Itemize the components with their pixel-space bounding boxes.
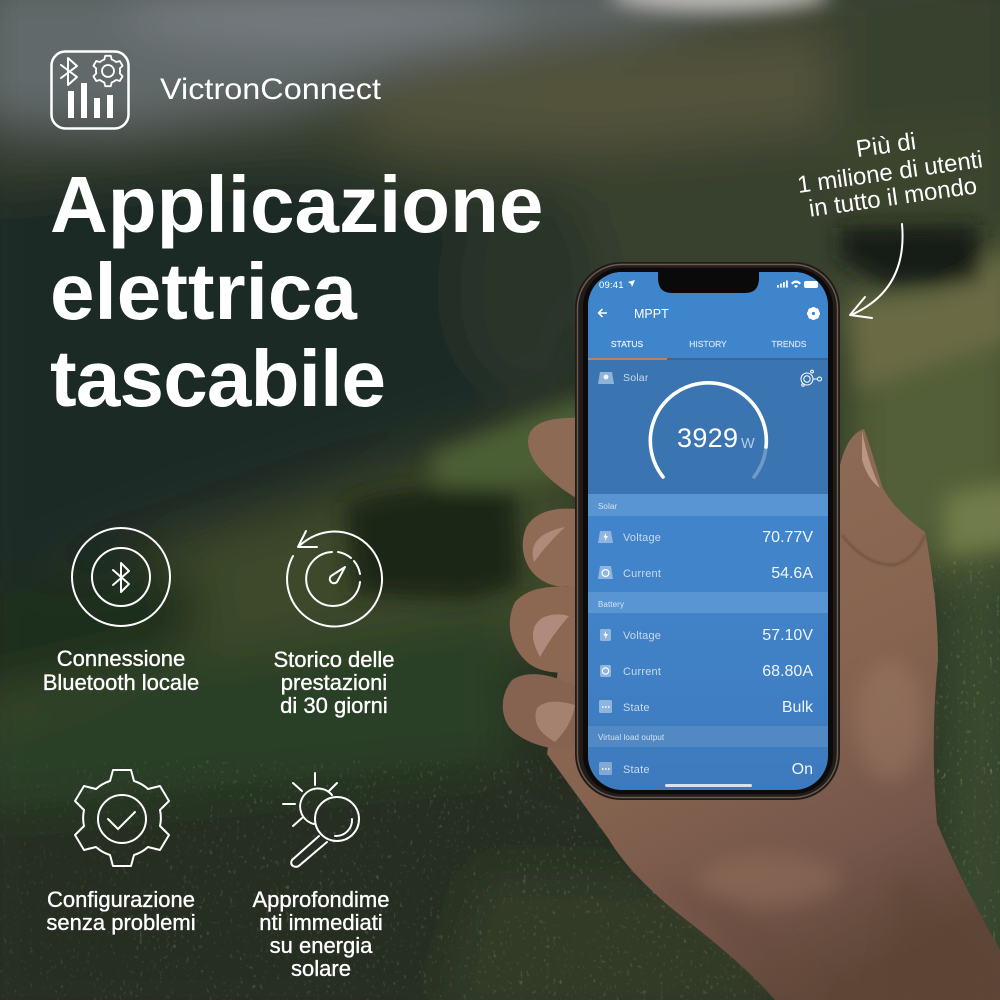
home indicator bbox=[665, 784, 752, 787]
feature: 30 day history bbox=[273, 531, 395, 718]
label bbox=[46, 887, 196, 935]
brand name: VictronConnect bbox=[160, 73, 381, 106]
tabs: STATUS bbox=[611, 339, 643, 349]
phone body bbox=[575, 262, 840, 800]
gauge arc bbox=[754, 447, 766, 477]
section: virtual load output: State bbox=[623, 764, 650, 776]
section: battery: 57.10V bbox=[762, 627, 813, 644]
network icon bbox=[801, 370, 822, 386]
label: Configurazione bbox=[47, 887, 195, 912]
thumb nail edge bbox=[862, 431, 880, 488]
section: virtual load output: Virtual load output bbox=[598, 733, 665, 742]
section: battery: Current bbox=[623, 666, 661, 678]
palm shading and highlights bbox=[650, 660, 1000, 1000]
title: tascabile bbox=[50, 334, 385, 423]
app logo icon bbox=[52, 52, 128, 128]
section: battery: Bulk bbox=[782, 699, 814, 716]
solar icon bbox=[598, 372, 614, 384]
index finger bbox=[528, 418, 590, 506]
callout text: in tutto il mondo bbox=[807, 172, 979, 223]
section: solar bbox=[588, 494, 828, 582]
label: Approfondime bbox=[253, 887, 389, 912]
callout text bbox=[796, 128, 984, 223]
callout text: 1 milione di utenti bbox=[796, 146, 984, 199]
title: elettrica bbox=[50, 247, 357, 336]
title bbox=[50, 160, 543, 423]
title: Applicazione bbox=[50, 160, 543, 249]
section: virtual load output bbox=[588, 726, 828, 778]
pinky finger bbox=[503, 674, 590, 749]
gauge panel bbox=[588, 360, 828, 494]
screen title: MPPT bbox=[634, 307, 669, 321]
section: battery: State bbox=[623, 702, 650, 714]
feature: easy configuration bbox=[46, 770, 196, 935]
section: solar: 70.77V bbox=[762, 529, 813, 546]
middle fingernail bbox=[533, 527, 565, 562]
label: Connessione bbox=[57, 646, 185, 671]
label: Bluetooth locale bbox=[43, 670, 199, 695]
section: battery: Battery bbox=[598, 600, 624, 609]
label: senza problemi bbox=[46, 910, 196, 935]
label: di 30 giorni bbox=[280, 693, 388, 718]
ring finger bbox=[510, 587, 590, 673]
palm and wrist bbox=[547, 429, 1000, 1000]
section: solar: Current bbox=[623, 568, 661, 580]
feature: bluetooth connection bbox=[43, 528, 199, 695]
section: solar: Solar bbox=[598, 502, 617, 511]
ring fingernail bbox=[533, 614, 569, 657]
label: nti immediati bbox=[259, 910, 383, 935]
status icons bbox=[777, 280, 818, 288]
back arrow bbox=[598, 309, 607, 317]
section: battery: 68.80A bbox=[762, 663, 813, 680]
icon: bluetooth bbox=[72, 528, 170, 626]
section: battery: Voltage bbox=[623, 630, 661, 642]
callout text: Più di bbox=[854, 128, 918, 163]
app header bar: HISTORY bbox=[689, 339, 727, 349]
label: Storico delle bbox=[273, 647, 395, 672]
icon: gear with check bbox=[75, 770, 169, 866]
section: battery bbox=[588, 592, 828, 716]
icon: gauge with back arrow bbox=[287, 531, 382, 626]
icon: sun and magnifier bbox=[283, 773, 359, 867]
callout arrow bbox=[850, 224, 903, 318]
thumb crease bbox=[842, 535, 925, 565]
label: solare bbox=[291, 956, 351, 981]
gauge panel: Solar bbox=[623, 372, 649, 384]
label bbox=[253, 887, 389, 981]
section: virtual load output: On bbox=[792, 761, 813, 778]
label: su energia bbox=[270, 933, 373, 958]
app header bar: TRENDS bbox=[772, 339, 807, 349]
middle finger bbox=[523, 509, 590, 587]
section: solar: 54.6A bbox=[771, 565, 813, 582]
hand holding the phone bbox=[503, 418, 1000, 1000]
section: solar: Voltage bbox=[623, 532, 661, 544]
gauge panel: W bbox=[741, 436, 755, 452]
bluetooth glyph bbox=[61, 58, 77, 85]
label: prestazioni bbox=[281, 670, 387, 695]
label bbox=[273, 647, 395, 718]
settings gear bbox=[807, 307, 820, 320]
gauge value: 3929 bbox=[677, 423, 738, 453]
screen bbox=[588, 272, 828, 790]
location arrow bbox=[628, 280, 635, 287]
pinky fingernail bbox=[535, 702, 575, 742]
bars bbox=[68, 83, 113, 118]
label bbox=[43, 646, 199, 695]
feature: solar insights bbox=[253, 773, 389, 981]
notch bbox=[658, 271, 759, 293]
status time: 09:41 bbox=[599, 280, 624, 291]
app header bar bbox=[588, 272, 828, 360]
small gear bbox=[93, 56, 123, 86]
